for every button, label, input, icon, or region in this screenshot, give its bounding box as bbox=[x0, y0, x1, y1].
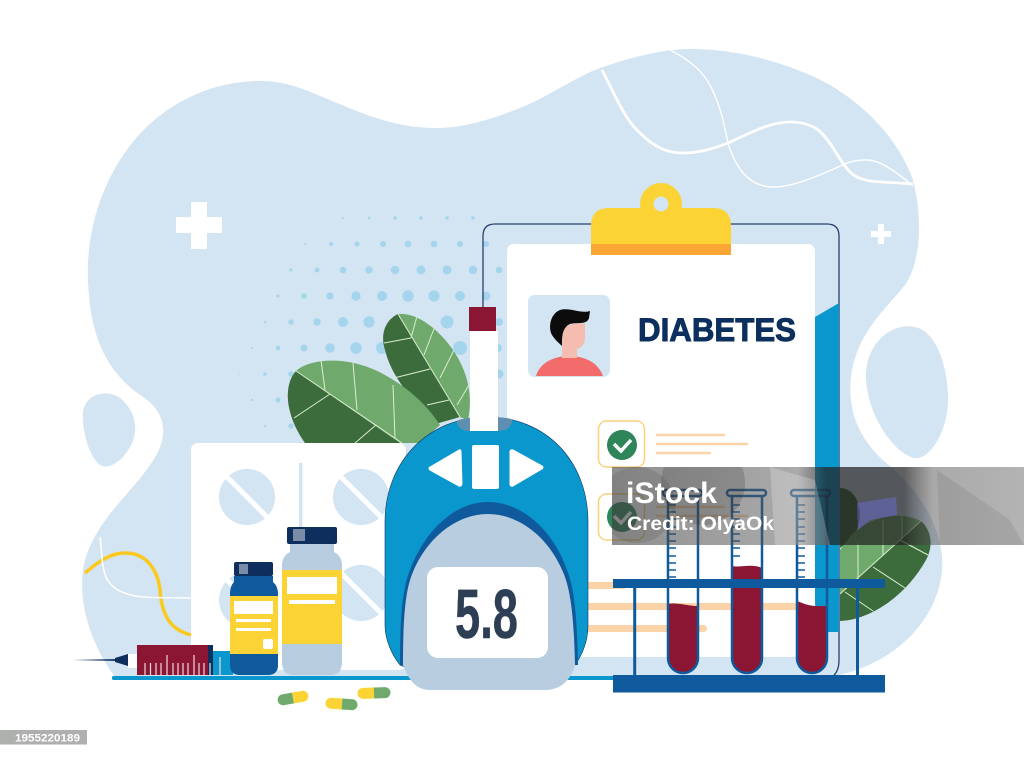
meter reading: 5.8 bbox=[455, 575, 518, 653]
plus icon small bbox=[871, 224, 891, 244]
white thin line bbox=[100, 537, 191, 598]
large medicine bottle bbox=[282, 527, 342, 675]
plus icon large bbox=[176, 202, 222, 249]
test tube rack with blood tubes bbox=[613, 490, 885, 692]
checklist item 1 bbox=[598, 421, 748, 467]
capsules bbox=[277, 687, 391, 711]
glucose meter bbox=[385, 415, 588, 690]
small blob right bbox=[866, 326, 948, 458]
clipboard board outline bbox=[483, 224, 839, 677]
stock image id: 1955220189 bbox=[15, 732, 80, 744]
clipboard clip bbox=[591, 183, 731, 255]
yellow tube bbox=[85, 553, 191, 635]
syringe bbox=[73, 645, 233, 675]
watermark text: iStock bbox=[626, 477, 717, 510]
stock image id bbox=[0, 730, 87, 744]
white swirl lines bbox=[602, 50, 913, 187]
small blob left bbox=[83, 393, 135, 466]
clipboard blue corner bbox=[815, 303, 839, 632]
watermark band: Credit: OlyaOk bbox=[627, 513, 774, 535]
right leaf behind clipboard bbox=[840, 488, 931, 621]
background blob bbox=[82, 49, 942, 677]
pill blister pack bbox=[191, 443, 406, 670]
title: diabetes: DIABETES bbox=[638, 312, 796, 348]
shelf line bbox=[112, 676, 642, 680]
halftone dots bbox=[238, 216, 504, 429]
test strip bbox=[469, 307, 498, 431]
upper leaf bbox=[383, 314, 470, 425]
left leaf bbox=[288, 360, 440, 443]
patient portrait bbox=[528, 295, 610, 377]
watermark band bbox=[612, 467, 1024, 545]
checklist item 2 bbox=[598, 494, 748, 540]
orange text bars on paper bbox=[585, 582, 796, 632]
small medicine bottle bbox=[230, 562, 278, 675]
clipboard paper bbox=[507, 244, 815, 657]
